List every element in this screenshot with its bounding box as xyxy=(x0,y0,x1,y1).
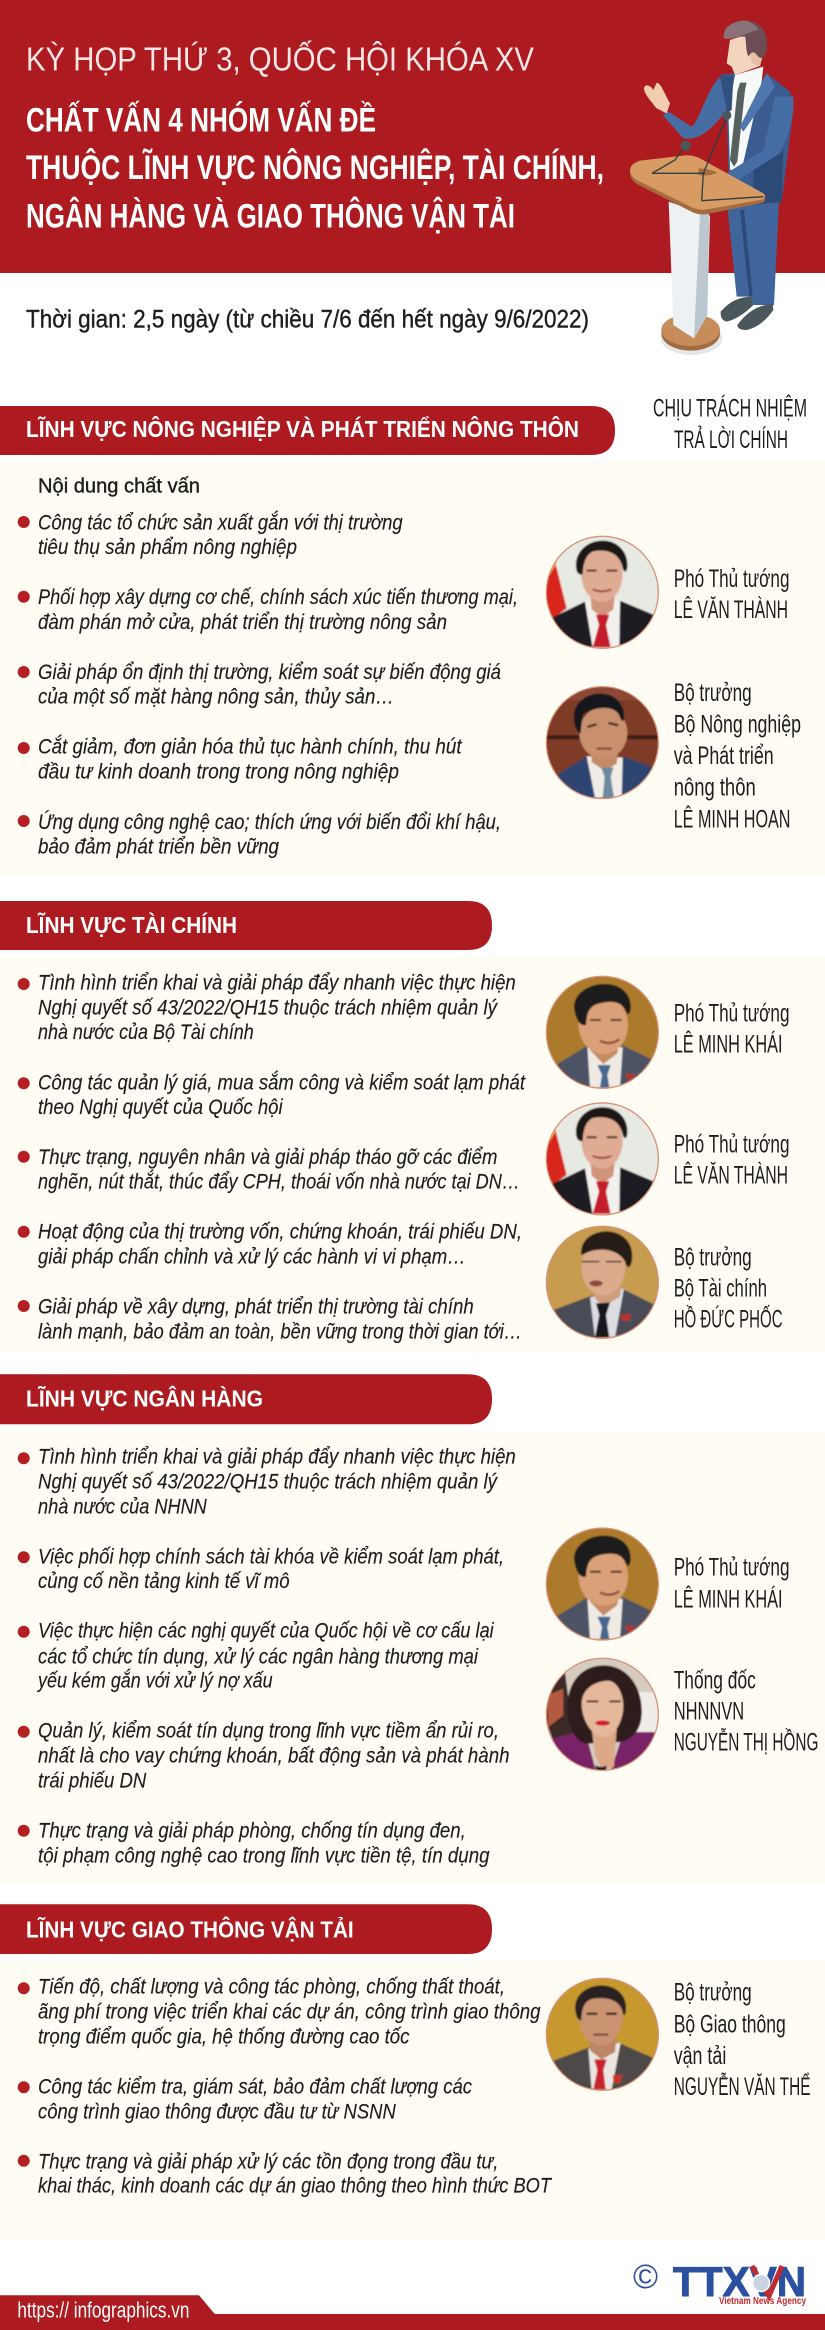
list item: Tình hình triển khai và giải pháp đẩy nhanh việc thực hiện xyxy=(38,971,516,994)
list item: Công tác quản lý giá, mua sắm công và kiểm soát lạm phát xyxy=(38,1071,526,1094)
official name: Nguyễn Văn Thể: vận tải xyxy=(674,2042,726,2070)
list item: Việc thực hiện các nghị quyết của Quốc hội về cơ cấu lại xyxy=(38,1620,495,1643)
list item xyxy=(18,1719,509,1792)
list item: Cắt giảm, đơn giản hóa thủ tục hành chính, thu hút xyxy=(38,736,463,759)
section heading: transport xyxy=(0,1904,492,1954)
list item: Thực trạng và giải pháp xử lý các tồn đọng trong đầu tư, xyxy=(38,2150,498,2173)
main title: CHẤT VẤN 4 NHÓM VẤN ĐỀ xyxy=(26,102,376,140)
list item xyxy=(18,2150,553,2198)
list item: Thực trạng và giải pháp phòng, chống tín dụng đen, xyxy=(38,1819,466,1842)
list item xyxy=(18,736,463,784)
main title xyxy=(26,102,604,236)
logo: TTXVN: TTXVN xyxy=(673,2258,806,2305)
official name: Hồ Đức Phớc: Bộ Tài chính xyxy=(674,1275,767,1303)
section heading: transport: LĨNH VỰC GIAO THÔNG VẬN TẢI xyxy=(26,1914,354,1942)
official name: Nguyễn Văn Thể xyxy=(674,1979,810,2101)
section heading: agriculture: LĨNH VỰC NÔNG NGHIỆP VÀ PHÁT TRIỂN NÔNG THÔN xyxy=(26,415,579,442)
portrait: Lê Minh Khái xyxy=(540,970,665,1095)
official name: Nguyễn Thị Hồng: Thống đốc xyxy=(674,1666,756,1694)
list item: của một số mặt hàng nông sản, thủy sản… xyxy=(38,686,394,709)
column heading: responsible officials xyxy=(653,394,807,454)
list item: Nghị quyết số 43/2022/QH15 thuộc trách nhiệm quản lý xyxy=(38,1470,498,1493)
list item xyxy=(18,586,518,634)
list item xyxy=(18,1221,522,1268)
list item xyxy=(18,1146,520,1194)
portrait: Lê Văn Thành xyxy=(540,1097,665,1222)
list item: Tình hình triển khai và giải pháp đẩy nhanh việc thực hiện xyxy=(38,1445,516,1468)
list item: đàm phán mở cửa, phát triển thị trường nông sản xyxy=(38,611,447,634)
portrait: Nguyễn Văn Thể xyxy=(546,1978,659,2091)
list item: bảo đảm phát triển bền vững xyxy=(38,835,279,858)
list item: các tổ chức tín dụng, xử lý các ngân hàng thương mại xyxy=(38,1645,479,1668)
list item: Giải pháp ổn định thị trường, kiểm soát sự biến động giá xyxy=(38,661,501,684)
list item xyxy=(18,971,516,1044)
list item xyxy=(18,1295,522,1343)
list item: Quản lý, kiểm soát tín dụng trong lĩnh vực tiềm ẩn rủi ro, xyxy=(38,1719,499,1742)
section heading: finance: LĨNH VỰC TÀI CHÍNH xyxy=(26,911,237,938)
list item xyxy=(18,511,403,559)
portrait: Hồ Đức Phớc xyxy=(546,1226,659,1339)
list item xyxy=(18,1819,490,1868)
section heading: banking xyxy=(0,1374,492,1424)
list item xyxy=(18,1975,541,2048)
official name: Hồ Đức Phớc: Bộ trưởng xyxy=(674,1244,752,1272)
session subtitle: KỲ HỌP THỨ 3, QUỐC HỘI KHÓA XV xyxy=(26,40,534,78)
portrait: Lê Minh Hoan xyxy=(546,686,659,800)
list item: theo Nghị quyết của Quốc hội xyxy=(38,1096,284,1119)
logo: TTXVN: © xyxy=(633,2258,658,2296)
official name: Nguyễn Thị Hồng xyxy=(674,1666,818,1757)
list item: Hoạt động của thị trường vốn, chứng khoán, trái phiếu DN, xyxy=(38,1221,522,1244)
list item: giải pháp chấn chỉnh và xử lý các hành vi vi phạm… xyxy=(38,1245,466,1268)
list item: khai thác, kinh doanh các dự án giao thông theo hình thức BOT xyxy=(38,2175,553,2198)
list item xyxy=(18,1445,516,1518)
official name: Nguyễn Thị Hồng: NHNNVN xyxy=(674,1697,744,1725)
list item: nghẽn, nút thắt, thúc đẩy CPH, thoái vốn nhà nước tại DN… xyxy=(38,1171,520,1194)
panel: agriculture xyxy=(0,406,825,876)
official name: Lê Văn Thành xyxy=(674,565,790,624)
portrait: Lê Văn Thành xyxy=(540,530,665,655)
list item xyxy=(18,811,501,858)
list item: Phối hợp xây dựng cơ chế, chính sách xúc tiến thương mại, xyxy=(38,586,518,609)
list item: nhà nước của NHNN xyxy=(38,1495,208,1518)
list item: Nghị quyết số 43/2022/QH15 thuộc trách nhiệm quản lý xyxy=(38,996,498,1019)
list item: Thực trạng, nguyên nhân và giải pháp tháo gỡ các điểm xyxy=(38,1146,497,1169)
official name: Hồ Đức Phớc xyxy=(674,1244,783,1334)
section heading: finance xyxy=(0,901,492,950)
list item xyxy=(18,1071,526,1119)
list item: Công tác kiểm tra, giám sát, bảo đảm chất lượng các xyxy=(38,2075,472,2098)
portrait: Lê Minh Khái xyxy=(540,1522,665,1647)
list item xyxy=(18,2075,472,2123)
list item: Ứng dụng công nghệ cao; thích ứng với biến đổi khí hậu, xyxy=(38,811,501,834)
official name: Lê Minh Hoan: Bộ trưởng xyxy=(674,679,752,707)
illustration: speaker at podium xyxy=(630,21,793,355)
list item xyxy=(18,1545,504,1593)
list item xyxy=(18,1620,495,1693)
list item: công trình giao thông được đầu tư từ NSNN xyxy=(38,2100,397,2123)
official name: Lê Minh Hoan: và Phát triển xyxy=(674,742,774,770)
logo: TTXVN: Vietnam News Agency xyxy=(719,2296,806,2307)
panel: transport xyxy=(0,1904,825,2241)
main title: NGÂN HÀNG VÀ GIAO THÔNG VẬN TẢI xyxy=(26,197,515,236)
official name: Lê Minh Hoan: nông thôn xyxy=(674,774,756,802)
list item: củng cố nền tảng kinh tế vĩ mô xyxy=(38,1570,290,1593)
list item: tội phạm công nghệ cao trong lĩnh vực tiền tệ, tín dụng xyxy=(38,1845,490,1868)
list item: Việc phối hợp chính sách tài khóa về kiểm soát lạm phát, xyxy=(38,1545,504,1568)
official name: Lê Minh Khái xyxy=(674,1000,790,1059)
list item: trọng điểm quốc gia, hệ thống đường cao tốc xyxy=(38,2025,410,2048)
subheading: questioning content: Nội dung chất vấn xyxy=(38,476,200,498)
footer bar with website: https:// infographics.vn xyxy=(17,2297,189,2322)
official name: Lê Minh Hoan xyxy=(674,679,801,833)
section heading: banking: LĨNH VỰC NGÂN HÀNG xyxy=(26,1385,263,1412)
official name: Lê Văn Thành xyxy=(674,1130,790,1189)
list item: nhà nước của Bộ Tài chính xyxy=(38,1021,254,1044)
official name: Nguyễn Văn Thể: Bộ trưởng xyxy=(674,1979,752,2007)
list item: ãng phí trong việc triển khai các dự án, công trình giao thông xyxy=(38,2000,541,2023)
list item: trái phiếu DN xyxy=(38,1769,147,1792)
header band xyxy=(0,0,825,273)
list item: yếu kém gắn với xử lý nợ xấu xyxy=(36,1670,273,1693)
list item: đầu tư kinh doanh trong trong nông nghiệp xyxy=(38,761,399,784)
section heading: agriculture xyxy=(0,406,615,455)
list item: Tiến độ, chất lượng và công tác phòng, chống thất thoát, xyxy=(38,1975,505,1998)
panel: banking xyxy=(0,1374,825,1882)
event time: Thời gian: 2,5 ngày (từ chiều 7/6 đến hết ngày 9/6/2022) xyxy=(26,306,589,334)
list item: Giải pháp về xây dựng, phát triển thị trường tài chính xyxy=(38,1295,474,1318)
list item: Công tác tổ chức sản xuất gắn với thị trường xyxy=(38,511,403,534)
list item: lành mạnh, bảo đảm an toàn, bền vững trong thời gian tới… xyxy=(38,1320,522,1343)
footer bar with website xyxy=(0,2295,825,2330)
list item: tiêu thụ sản phẩm nông nghiệp xyxy=(38,536,297,559)
panel: finance xyxy=(0,901,825,1353)
list item xyxy=(18,661,501,709)
portrait: Nguyễn Thị Hồng xyxy=(546,1658,659,1771)
list item: nhất là cho vay chứng khoán, bất động sản và phát hành xyxy=(38,1745,510,1768)
main title: THUỘC LĨNH VỰC NÔNG NGHIỆP, TÀI CHÍNH, xyxy=(26,148,604,187)
official name: Lê Minh Khái xyxy=(674,1554,790,1613)
